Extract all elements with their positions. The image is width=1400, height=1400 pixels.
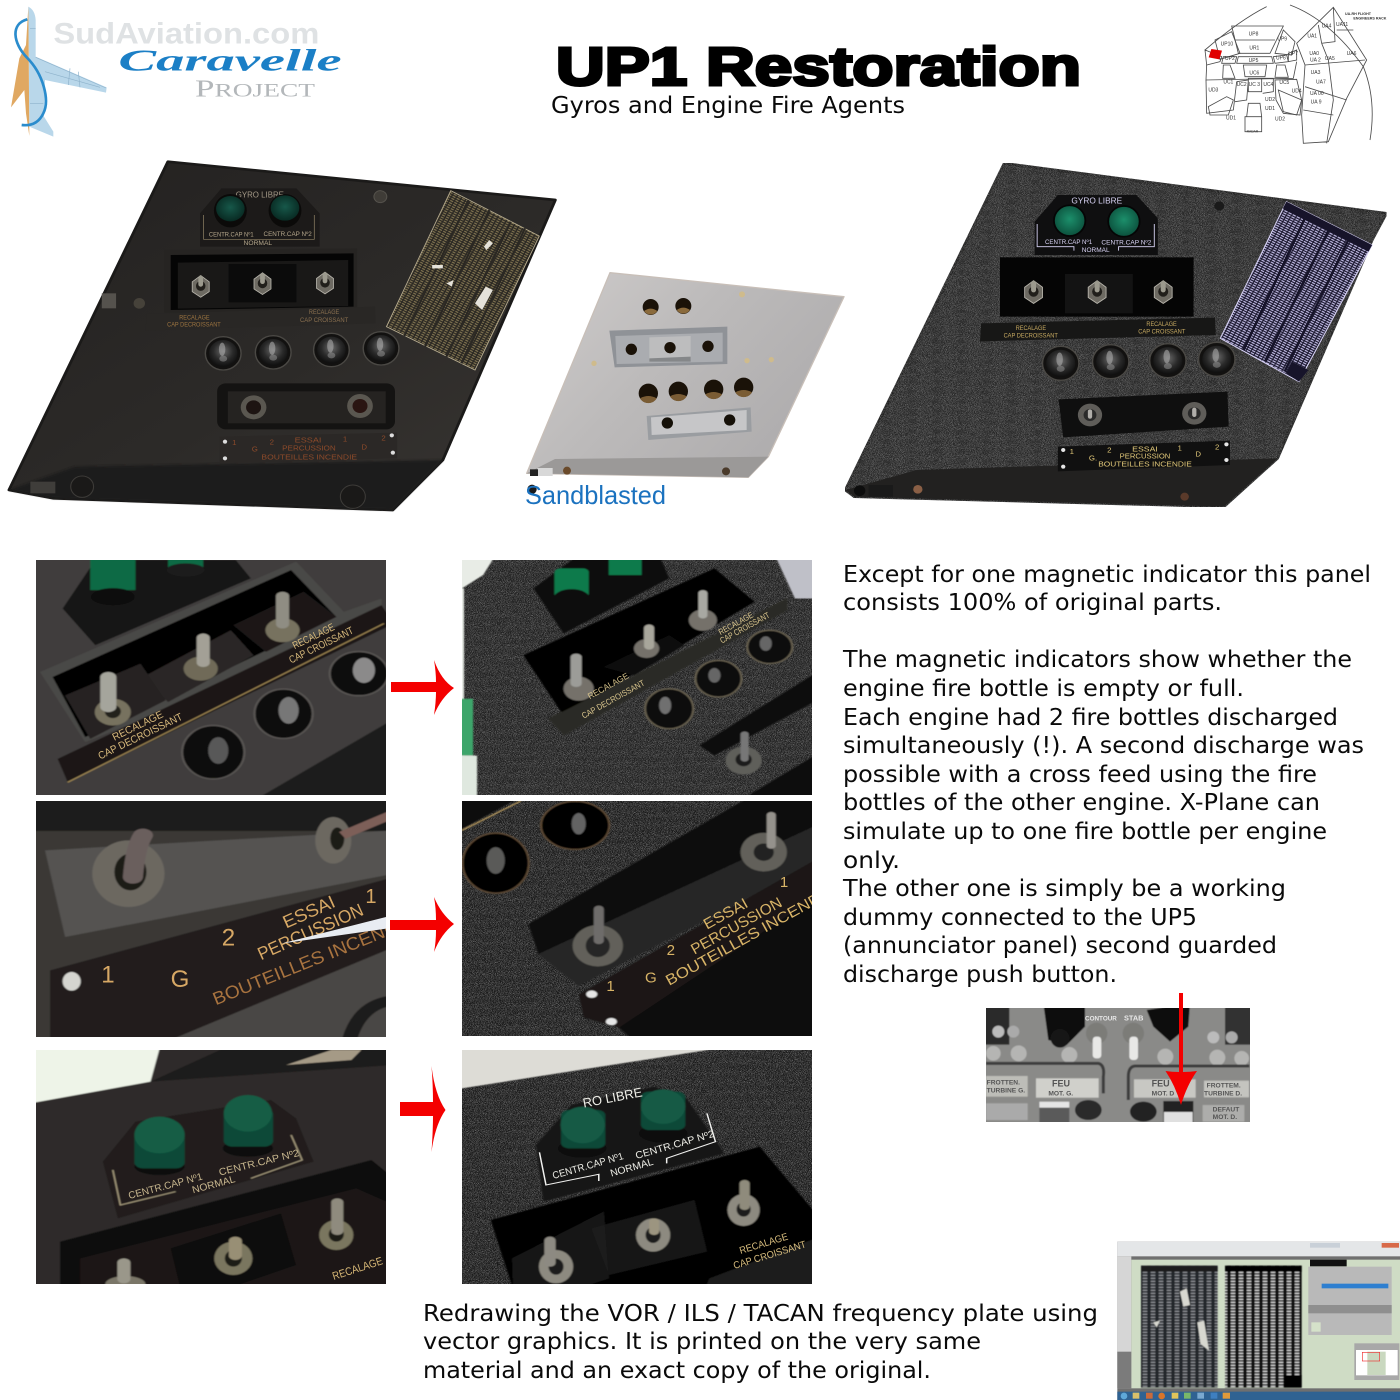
fire bottle plate: PERCUSSION bbox=[282, 444, 336, 453]
plate text: 1 bbox=[365, 886, 377, 908]
diagram: cockpit panel locator bbox=[1204, 4, 1387, 144]
fire bottle plate: G. bbox=[1089, 454, 1097, 463]
panel labels bbox=[1208, 12, 1387, 133]
panel body bbox=[527, 273, 844, 477]
recalage label strip: RECALAGE bbox=[1016, 325, 1047, 332]
recalage label strip: RECALAGE bbox=[309, 309, 340, 316]
plate text: 2 bbox=[667, 942, 675, 959]
recalage label strip: RECALAGE bbox=[1146, 321, 1177, 328]
text block: panel description: Except for one magnetic indicator this panel bbox=[843, 562, 1371, 588]
label text: RECALAGE bbox=[110, 709, 165, 744]
panel labels: UP9 bbox=[1277, 37, 1287, 43]
fire bottle plate: D bbox=[361, 443, 368, 451]
gyro plate: GYRO LIBRE bbox=[1071, 196, 1123, 205]
plate text bbox=[101, 886, 417, 1009]
plate text: RECALAGE bbox=[331, 1255, 384, 1283]
photo: before, recalage strip bbox=[36, 560, 386, 795]
plate text: CAP CROISSANT bbox=[732, 1239, 808, 1272]
frequency plate bbox=[1220, 202, 1372, 382]
fire bottle plate: 2 bbox=[381, 434, 386, 443]
text block: panel description: consists 100% of original parts. bbox=[843, 590, 1222, 616]
plate text: 1 bbox=[606, 978, 615, 995]
fire bottle plate bbox=[220, 433, 397, 463]
panel labels: UC4 bbox=[1263, 82, 1274, 88]
panel labels: UC5 bbox=[1279, 80, 1290, 86]
panel labels: ENGINEERS RACK bbox=[1353, 16, 1387, 20]
logo text: Caravelle: Caravelle bbox=[118, 43, 342, 77]
label text: RECALAGE bbox=[717, 610, 755, 637]
annunciator labels: DEFAUT bbox=[1213, 1107, 1239, 1114]
text block: frequency plate note: material and an exact copy of the original. bbox=[423, 1358, 931, 1384]
subtitle: Gyros and Engine Fire Agents bbox=[551, 93, 905, 119]
annunciator labels: FEU bbox=[1152, 1079, 1170, 1089]
recalage label strip: CAP CROISSANT bbox=[300, 317, 349, 324]
gyro plate bbox=[1035, 195, 1158, 255]
text block: panel description: dummy connected to the UP5 bbox=[843, 905, 1197, 931]
gyro plate: CENTR.CAP Nº2 bbox=[264, 231, 312, 238]
annunciator labels: FEU bbox=[1052, 1079, 1070, 1089]
arrow: row 3 bbox=[400, 1066, 446, 1152]
panel labels: UA1 bbox=[1307, 33, 1317, 39]
lower recess with switches bbox=[1059, 392, 1229, 437]
text block: panel description: (annunciator panel) second guarded bbox=[843, 933, 1277, 959]
layers panel bbox=[1308, 1267, 1392, 1335]
text block: panel description: The magnetic indicators show whether the bbox=[842, 647, 1352, 673]
navigator panel bbox=[1354, 1343, 1399, 1380]
panel labels: UR1 bbox=[1249, 45, 1260, 51]
screws bbox=[591, 291, 774, 366]
screenshot: vector graphics editor bbox=[1117, 1242, 1400, 1400]
frequency plate bbox=[386, 191, 539, 370]
text block: panel description: The other one is simply be a working bbox=[842, 876, 1286, 902]
panel labels: UP10 bbox=[1221, 42, 1233, 48]
annunciator labels: STAB bbox=[1124, 1014, 1143, 1023]
gyro plate: GYRO LIBRE bbox=[236, 190, 284, 199]
panel body bbox=[9, 162, 555, 510]
toggle switch recess bbox=[1000, 257, 1194, 317]
photo: UP5 annunciator panel greyscale bbox=[986, 1008, 1250, 1122]
panel labels: UA0 bbox=[1309, 51, 1319, 57]
fire bottle plate: 1 bbox=[1070, 447, 1074, 456]
label text: CAP CROISSANT bbox=[287, 625, 356, 666]
panel labels: UA5 bbox=[1325, 56, 1335, 62]
panel labels: UP8 bbox=[1249, 31, 1259, 37]
panel labels: UC6 bbox=[1249, 71, 1260, 77]
redrawn plate bbox=[1225, 1266, 1302, 1388]
recalage label strip: CAP CROISSANT bbox=[1138, 329, 1185, 335]
panel labels: UA-RH FLIGHT bbox=[1345, 12, 1372, 16]
annunciator labels: MOT. G. bbox=[1048, 1091, 1073, 1098]
plate text: NORMAL bbox=[191, 1174, 237, 1196]
label text: RECALAGE bbox=[586, 670, 631, 701]
annunciator labels: FROTTEM. bbox=[1207, 1082, 1241, 1089]
fire bottle plate: PERCUSSION bbox=[1120, 452, 1170, 461]
plate text: PERCUSSION bbox=[254, 900, 366, 964]
photo: after, recalage strip bbox=[462, 560, 812, 795]
text block: panel description: simulate up to one fire bottle per engine bbox=[843, 819, 1327, 845]
plate text: RO LIBRE bbox=[581, 1084, 644, 1111]
panel labels: UD2 bbox=[1265, 97, 1275, 103]
panel labels: RADAR bbox=[1247, 129, 1259, 133]
plate text: 2 bbox=[222, 925, 235, 952]
panel labels: UA3 bbox=[1311, 70, 1321, 76]
text block: panel description: discharge push button. bbox=[843, 962, 1117, 988]
toggle switch recess bbox=[164, 248, 357, 313]
label text: CAP DECROISSANT bbox=[96, 711, 185, 762]
caption: Sandblasted: Sandblasted bbox=[525, 480, 666, 510]
annunciator labels: CONTOUR bbox=[1085, 1016, 1117, 1023]
label text: CAP CROISSANT bbox=[718, 610, 771, 645]
plate text: CENTR.CAP Nº1 bbox=[551, 1151, 625, 1182]
panel labels: UD4 bbox=[1292, 88, 1302, 94]
fire bottle plate: G bbox=[252, 445, 258, 454]
magnetic indicators bbox=[1042, 342, 1235, 380]
arrow: row 1 bbox=[391, 660, 454, 715]
annunciator labels: TURBINE D. bbox=[1204, 1090, 1242, 1097]
text block: frequency plate note bbox=[423, 1301, 1098, 1384]
fire bottle plate: ESSAI bbox=[295, 436, 321, 445]
logo text: Project: PROJECT bbox=[195, 76, 315, 103]
text block: panel description: simultaneously (!). A second discharge was bbox=[843, 733, 1364, 759]
fire bottle plate bbox=[1058, 441, 1230, 471]
panel labels: UA 00 bbox=[1310, 91, 1324, 97]
indicator holes bbox=[639, 378, 753, 403]
plate text: CENTR.CAP Nº2 bbox=[218, 1148, 301, 1179]
plate text bbox=[551, 1084, 808, 1272]
arrow: row 2 bbox=[390, 897, 454, 952]
panel labels: UP7 bbox=[1288, 51, 1298, 57]
text block: frequency plate note: vector graphics. It is printed on the very same bbox=[423, 1329, 981, 1355]
gyro plate: NORMAL bbox=[244, 240, 273, 247]
panel labels: UP2 bbox=[1225, 56, 1235, 62]
fire bottle plate: BOUTEILLES INCENDIE bbox=[261, 453, 357, 461]
label text bbox=[580, 610, 771, 721]
icon: aircraft planform with ribbon bbox=[11, 7, 107, 137]
text block: panel description bbox=[842, 562, 1371, 988]
panel labels: UC2 bbox=[1237, 82, 1247, 88]
fire bottle plate: BOUTEILLES INCENDIE bbox=[1098, 460, 1192, 469]
text block: panel description: bottles of the other engine. X-Plane can bbox=[843, 790, 1320, 816]
gyro plate bbox=[200, 188, 320, 247]
recalage label strip: CAP DECROISSANT bbox=[1004, 333, 1058, 339]
plate text: G bbox=[171, 966, 189, 993]
panel labels: UD3 bbox=[1208, 88, 1219, 94]
title: UP1 Restoration bbox=[556, 37, 1081, 97]
fire bottle plate: 2 bbox=[1107, 446, 1112, 455]
bottom hardware bbox=[854, 201, 1224, 501]
gyro plate: CENTR.CAP Nº2 bbox=[1101, 240, 1152, 247]
plate text: 1 bbox=[780, 874, 788, 891]
annunciator labels bbox=[987, 1014, 1242, 1121]
annunciator labels: FROTTEN. bbox=[987, 1079, 1020, 1086]
fire bottle plate: D bbox=[1195, 450, 1202, 459]
bottom hardware bbox=[527, 467, 730, 494]
plate text: NORMAL bbox=[609, 1157, 655, 1180]
panel labels: UA11 bbox=[1336, 22, 1348, 28]
plate text: RECALAGE bbox=[738, 1232, 790, 1257]
plate text: 1 bbox=[101, 961, 115, 988]
panel labels: UC 3 bbox=[1249, 82, 1260, 88]
text block: panel description: only. bbox=[843, 848, 900, 874]
magnetic indicators bbox=[205, 332, 399, 370]
photo: after, fire bottle plate bbox=[462, 801, 838, 1036]
panel: restored panel bbox=[845, 163, 1386, 507]
screws and bottom hardware bbox=[30, 191, 387, 508]
recalage label strip: RECALAGE bbox=[179, 315, 210, 321]
fire bottle plate: 2 bbox=[1215, 443, 1219, 451]
label text: RECALAGE bbox=[291, 621, 337, 652]
panel labels: UA 2 bbox=[1310, 58, 1321, 64]
plate text: ESSAI bbox=[280, 892, 338, 932]
recalage label strip bbox=[146, 307, 376, 331]
text block: panel description: possible with a cross feed using the fire bbox=[843, 762, 1317, 788]
annunciator labels: MOT. D bbox=[1152, 1091, 1174, 1098]
fire bottle plate: 1 bbox=[232, 438, 237, 447]
text block: panel description: engine fire bottle is empty or full. bbox=[843, 676, 1244, 702]
plate text: BOUTEILLES INCENDIE bbox=[663, 882, 838, 989]
panel labels: UD1 bbox=[1265, 106, 1275, 112]
panel labels: UA7 bbox=[1316, 79, 1326, 85]
gyro plate: CENTR.CAP Nº1 bbox=[209, 232, 254, 239]
original plate scan bbox=[1141, 1266, 1218, 1388]
label text bbox=[96, 621, 356, 762]
fire bottle plate: 1 bbox=[343, 435, 347, 444]
plate text: PERCUSSION bbox=[688, 894, 785, 958]
panel: original worn panel bbox=[8, 160, 557, 512]
panel labels: UP5 bbox=[1249, 58, 1259, 64]
gyro plate: CENTR.CAP Nº1 bbox=[1045, 239, 1092, 246]
panel labels: UD1 bbox=[1226, 115, 1236, 121]
fire bottle plate: ESSAI bbox=[1132, 445, 1158, 453]
taskbar with application icons bbox=[1117, 1392, 1400, 1400]
plate text bbox=[606, 874, 838, 995]
plate text: ESSAI bbox=[701, 895, 751, 933]
gyro plate: NORMAL bbox=[1082, 247, 1110, 254]
photo: before, gyro plate bbox=[36, 1050, 386, 1284]
plate text: G bbox=[645, 970, 657, 987]
red marker: UP1 location bbox=[1209, 49, 1222, 59]
arrow: discharge button pointer bbox=[1166, 993, 1197, 1105]
lower recess with guarded switches bbox=[217, 383, 395, 429]
logo: SudAviation.com Caravelle Project bbox=[11, 6, 342, 136]
plate text: CENTR.CAP Nº2 bbox=[634, 1129, 716, 1162]
fire bottle plate: 2 bbox=[270, 438, 274, 446]
panel labels: UC1 bbox=[1223, 79, 1234, 85]
panel labels: UA 9 bbox=[1311, 99, 1322, 105]
panel labels: UA6 bbox=[1347, 51, 1357, 57]
fire bottle plate: 1 bbox=[1178, 444, 1182, 453]
toggle recess bbox=[609, 327, 727, 367]
lower recess bbox=[647, 407, 752, 440]
text block: panel description: Each engine had 2 fire bottles discharged bbox=[843, 705, 1338, 731]
photo: before, fire bottle plate bbox=[36, 801, 417, 1037]
plate text bbox=[127, 1148, 384, 1283]
panel: sandblasted bare panel bbox=[526, 272, 845, 494]
recalage label strip bbox=[980, 318, 1216, 341]
photo: after, gyro plate bbox=[462, 1050, 812, 1284]
annunciator labels: MOT. D. bbox=[1213, 1114, 1237, 1121]
panel labels: UP6 bbox=[1276, 55, 1286, 61]
recalage label strip: CAP DECROISSANT bbox=[167, 322, 221, 329]
pointer scratch bbox=[281, 917, 386, 944]
panel body bbox=[845, 163, 1386, 507]
plate text: BOUTEILLES INCENDIE bbox=[210, 910, 417, 1009]
gyro lamp holes bbox=[643, 298, 691, 315]
logo text: SudAviation.com: SudAviation.com bbox=[53, 18, 319, 51]
panel labels: UA4 bbox=[1322, 23, 1332, 29]
annunciator labels: TURBINE G. bbox=[987, 1087, 1025, 1094]
plate text: CENTR.CAP Nº1 bbox=[127, 1172, 204, 1202]
text block: frequency plate note: Redrawing the VOR / ILS / TACAN frequency plate using bbox=[423, 1301, 1098, 1327]
panel labels: UD2 bbox=[1275, 117, 1285, 123]
label text: CAP DECROISSANT bbox=[580, 678, 646, 721]
